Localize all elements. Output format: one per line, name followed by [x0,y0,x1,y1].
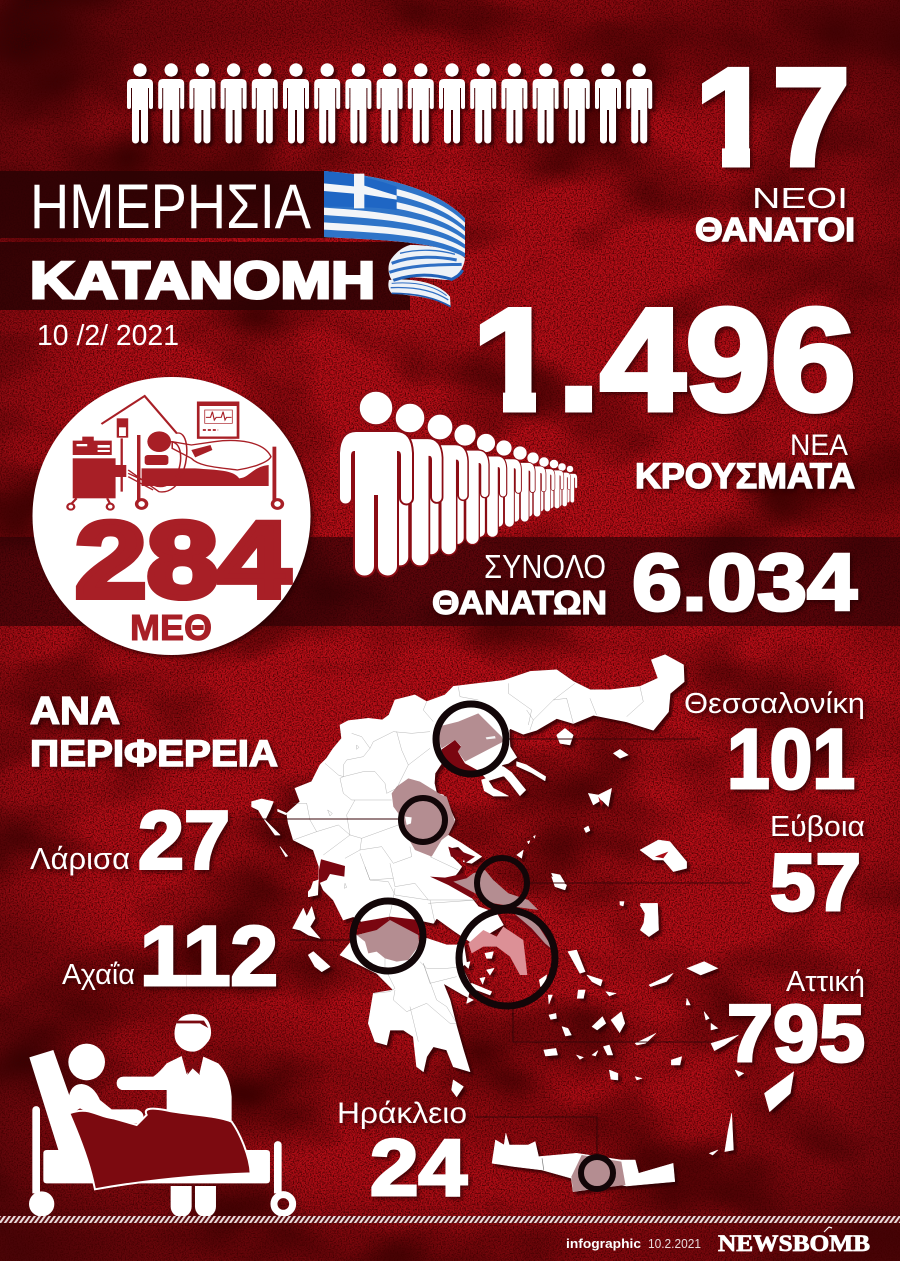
logo: newsbomb: NEWSBOMB [718,1231,870,1256]
total deaths figure: 6.034 [632,538,857,628]
region: Thessaloniki: 101 [727,712,855,806]
region: Thessaloniki: Θεσσαλονίκη [684,688,865,720]
total deaths figure: ΣΥΝΟΛΟ [484,548,606,585]
map of greece [250,655,794,1192]
icon: greek flag ribbon [324,171,465,307]
region: Larissa [30,794,230,886]
region: Euboea: 57 [770,838,861,928]
title bands [0,171,410,310]
new cases figure: ΚΡΟΥΣΜΑΤΑ [635,457,855,496]
title: daily distribution: ΚΑΤΑΝΟΜΗ [30,252,375,310]
regional heading [30,690,278,774]
land masses [252,655,794,1192]
highlight circles on regions [353,704,613,1189]
region: Achaia: 112 [140,909,278,1003]
panel: ICU beds circle [32,377,310,655]
icon: intensive care bed [67,396,282,510]
row of 17 people icons [127,63,652,143]
new deaths figure [696,66,858,246]
region: Attica: 795 [727,989,865,1079]
region: Larissa: 27 [138,794,230,886]
region: Larissa: Λάρισα [30,841,130,876]
new deaths figure: ΘΑΝΑΤΟΙ [695,211,855,248]
region: Thessaloniki [684,688,865,806]
leader lines [250,739,750,1156]
icon: queue of people [339,391,577,576]
region: Attica: Αττική [786,966,865,998]
date: 10 /2/ 2021 [37,320,179,352]
new cases figure [480,306,858,494]
new cases figure: ΝΕΑ [790,429,848,462]
icon: doctor and patient in bed [29,1014,293,1217]
highlighted regions and dark gulfs [319,713,538,910]
ICU count: 284 [75,499,290,620]
total deaths figure [432,538,857,628]
region: Heraklion [337,1097,468,1212]
regional heading: ΑΝΑ [30,690,120,733]
title: daily distribution [30,172,375,310]
regional heading: ΠΕΡΙΦΕΡΕΙΑ [30,733,278,774]
region: Achaia: Αχαΐα [62,959,135,991]
new deaths figure: 17 [695,40,850,195]
dark band behind totals [0,537,900,626]
title: daily distribution: ΗΜΕΡΗΣΙΑ [30,172,311,242]
hatched footer rule [0,1216,900,1223]
new deaths figure: ΝΕΟΙ [752,183,848,215]
new cases figure: 1.496 [472,278,856,441]
ICU label: ΜΕΘ [130,607,212,648]
region: Heraklion: 24 [370,1123,468,1212]
footer credit [566,1237,701,1251]
footer credit: infographic [566,1237,641,1251]
region: Achaia [62,909,278,1003]
total deaths figure: ΘΑΝΑΤΩΝ [432,584,607,621]
footer credit: 10.2.2021 [648,1237,701,1251]
prefecture borders [293,683,643,1042]
region: Heraklion: Ηράκλειο [337,1097,467,1130]
region: Euboea: Εύβοια [770,811,865,843]
